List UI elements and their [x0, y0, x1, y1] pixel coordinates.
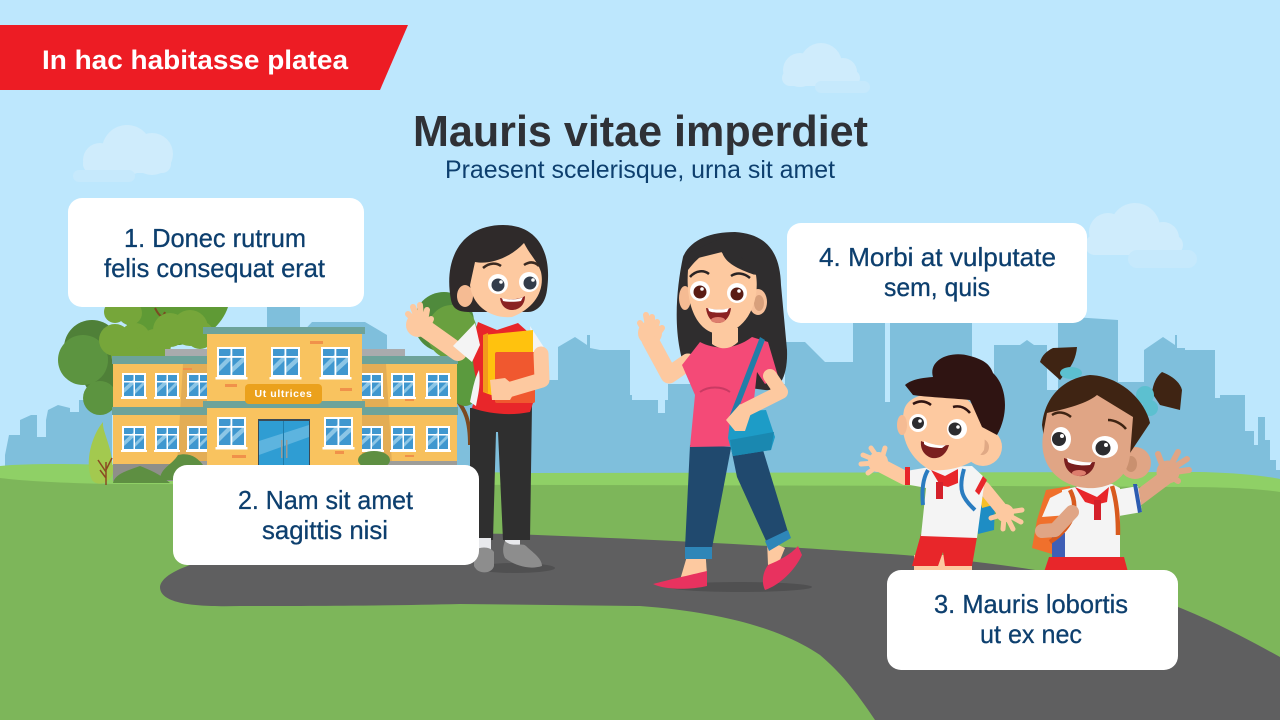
door — [258, 419, 310, 465]
blue panel — [1052, 533, 1065, 557]
central block — [207, 331, 362, 465]
hair back — [677, 232, 787, 390]
bag arm — [745, 376, 781, 410]
mouth — [1064, 458, 1095, 476]
subtitle: Praesent scelerisque, urna sit amet — [445, 156, 835, 184]
collar — [931, 469, 958, 487]
left hand — [861, 448, 885, 473]
ground — [0, 464, 1280, 720]
eyes — [488, 274, 508, 294]
right tree — [414, 292, 485, 445]
mouth — [706, 308, 731, 323]
feet — [680, 546, 707, 580]
shadow — [668, 582, 812, 592]
shirt — [905, 466, 985, 538]
shorts — [912, 534, 977, 566]
header banner: In hac habitasse platea — [42, 45, 349, 75]
left tree cluster — [58, 301, 228, 415]
cloud top — [782, 43, 870, 93]
small shrub — [89, 422, 113, 485]
shoes — [653, 571, 707, 589]
callout 2: sagittis nisi — [262, 515, 388, 545]
header banner — [0, 25, 408, 90]
vest — [472, 322, 534, 414]
callout 1 — [68, 198, 364, 307]
right hand — [991, 507, 1022, 529]
raised hand — [408, 305, 431, 333]
shadow — [475, 563, 555, 573]
school sign: Ut ultrices — [255, 388, 312, 400]
front bushes — [113, 451, 390, 483]
trousers — [470, 405, 532, 540]
collar — [1075, 487, 1109, 505]
ear — [964, 428, 1002, 466]
mouth — [500, 296, 525, 310]
eyes — [690, 281, 710, 301]
eyes — [909, 414, 927, 432]
cloud right — [1085, 203, 1197, 268]
callout 4: 4. Morbi at vulputate — [819, 242, 1056, 272]
title: Mauris vitae imperdiet — [413, 107, 868, 156]
callout 1: felis consequat erat — [104, 253, 326, 283]
bag — [728, 410, 775, 456]
skirt — [1044, 557, 1128, 572]
ear — [1119, 447, 1151, 479]
shirt — [1062, 484, 1120, 557]
left arm — [880, 465, 905, 478]
face — [903, 393, 985, 470]
t-shirt — [682, 337, 778, 447]
face — [749, 289, 767, 315]
backpack — [1032, 486, 1070, 558]
callout 3 — [887, 570, 1178, 670]
hair ties — [1060, 367, 1082, 379]
backpack straps — [923, 469, 975, 510]
legs — [914, 555, 972, 573]
callout 3: ut ex nec — [980, 619, 1082, 649]
callout 2 — [173, 465, 479, 565]
hair — [905, 354, 1005, 435]
callout 4: sem, quis — [884, 272, 990, 302]
road — [160, 534, 1280, 720]
callout 4 — [787, 223, 1087, 323]
face — [1042, 395, 1133, 488]
jeans — [685, 445, 788, 548]
eyes — [1051, 427, 1071, 451]
bricks — [183, 341, 414, 458]
woman — [640, 232, 812, 592]
girl student — [408, 225, 555, 573]
boy student — [861, 354, 1022, 573]
mouth — [921, 441, 949, 458]
right hand — [1158, 452, 1189, 481]
cloud left — [73, 125, 173, 182]
backpack straps — [1050, 486, 1118, 542]
waving hand — [640, 315, 662, 341]
wing windows — [121, 373, 147, 399]
jean cuffs — [685, 547, 712, 559]
neck — [712, 328, 738, 348]
holding arm — [508, 354, 542, 390]
city skyline — [5, 307, 1280, 490]
backpack — [975, 492, 995, 534]
school building — [112, 327, 458, 481]
right arm — [1137, 478, 1165, 499]
raised arm — [420, 325, 458, 352]
head — [449, 225, 548, 312]
callout 3: 3. Mauris lobortis — [934, 589, 1128, 619]
building wings — [113, 362, 457, 464]
hair — [1042, 375, 1150, 456]
hair buns — [1040, 347, 1077, 380]
books — [483, 330, 533, 395]
callout 1: 1. Donec rutrum — [124, 223, 306, 253]
right arm — [984, 488, 1002, 510]
waving arm — [650, 340, 688, 375]
wall base — [113, 461, 173, 481]
left arm — [1042, 512, 1072, 531]
sleeves — [453, 323, 480, 362]
school sign — [245, 384, 322, 404]
callout 2: 2. Nam sit amet — [238, 485, 414, 515]
socks and shoes — [476, 538, 520, 552]
young girl student — [1032, 347, 1189, 572]
